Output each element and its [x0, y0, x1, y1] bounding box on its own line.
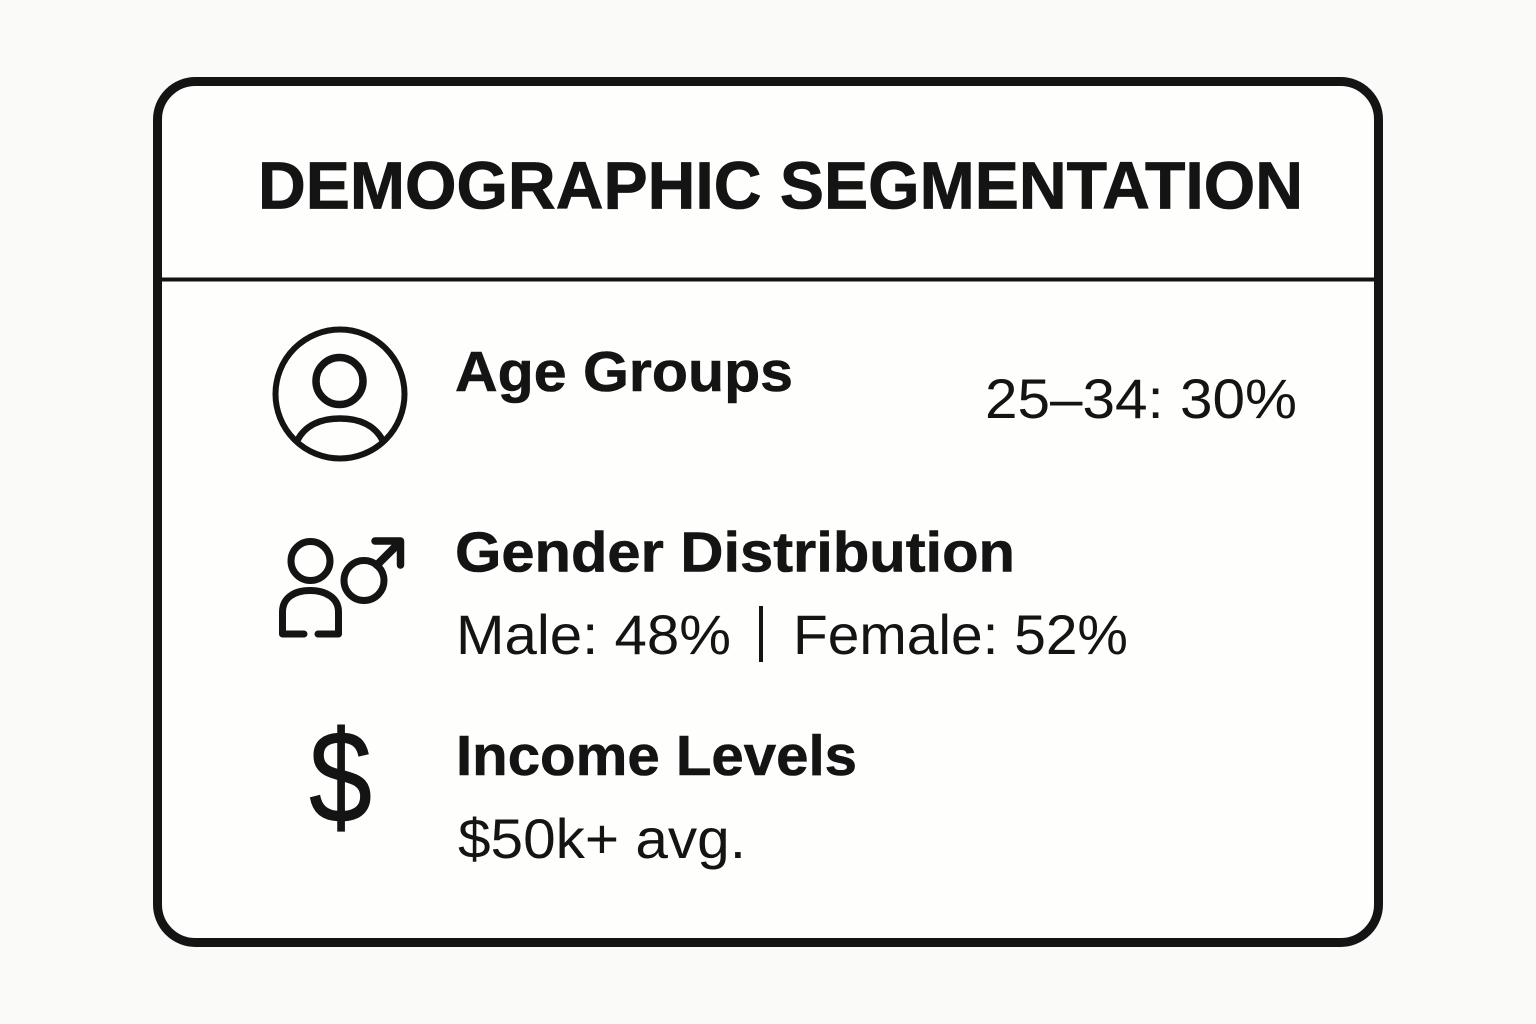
heading: age groups: Age Groups [455, 340, 793, 404]
row: income levels [309, 703, 857, 870]
icon: person and male symbol [282, 541, 400, 634]
title: DEMOGRAPHIC SEGMENTATION [258, 148, 1303, 224]
row: gender distribution [282, 520, 1128, 666]
row: age groups [276, 330, 1297, 458]
heading: income levels: Income Levels [456, 724, 857, 788]
heading: gender distribution: Gender Distribution [455, 520, 1015, 584]
value: male and female share: Male: 48% [456, 603, 731, 666]
icon: dollar sign: $ [309, 703, 372, 850]
value: age share: 25–34: 30% [985, 367, 1297, 430]
value: male and female share: Female: 52% [793, 603, 1128, 666]
icon: person in circle [276, 330, 404, 458]
value: average income: $50k+ avg. [458, 807, 746, 870]
value: male and female share [456, 603, 1128, 666]
card frame [158, 82, 1378, 942]
panel: demographic segmentation card [158, 82, 1378, 942]
